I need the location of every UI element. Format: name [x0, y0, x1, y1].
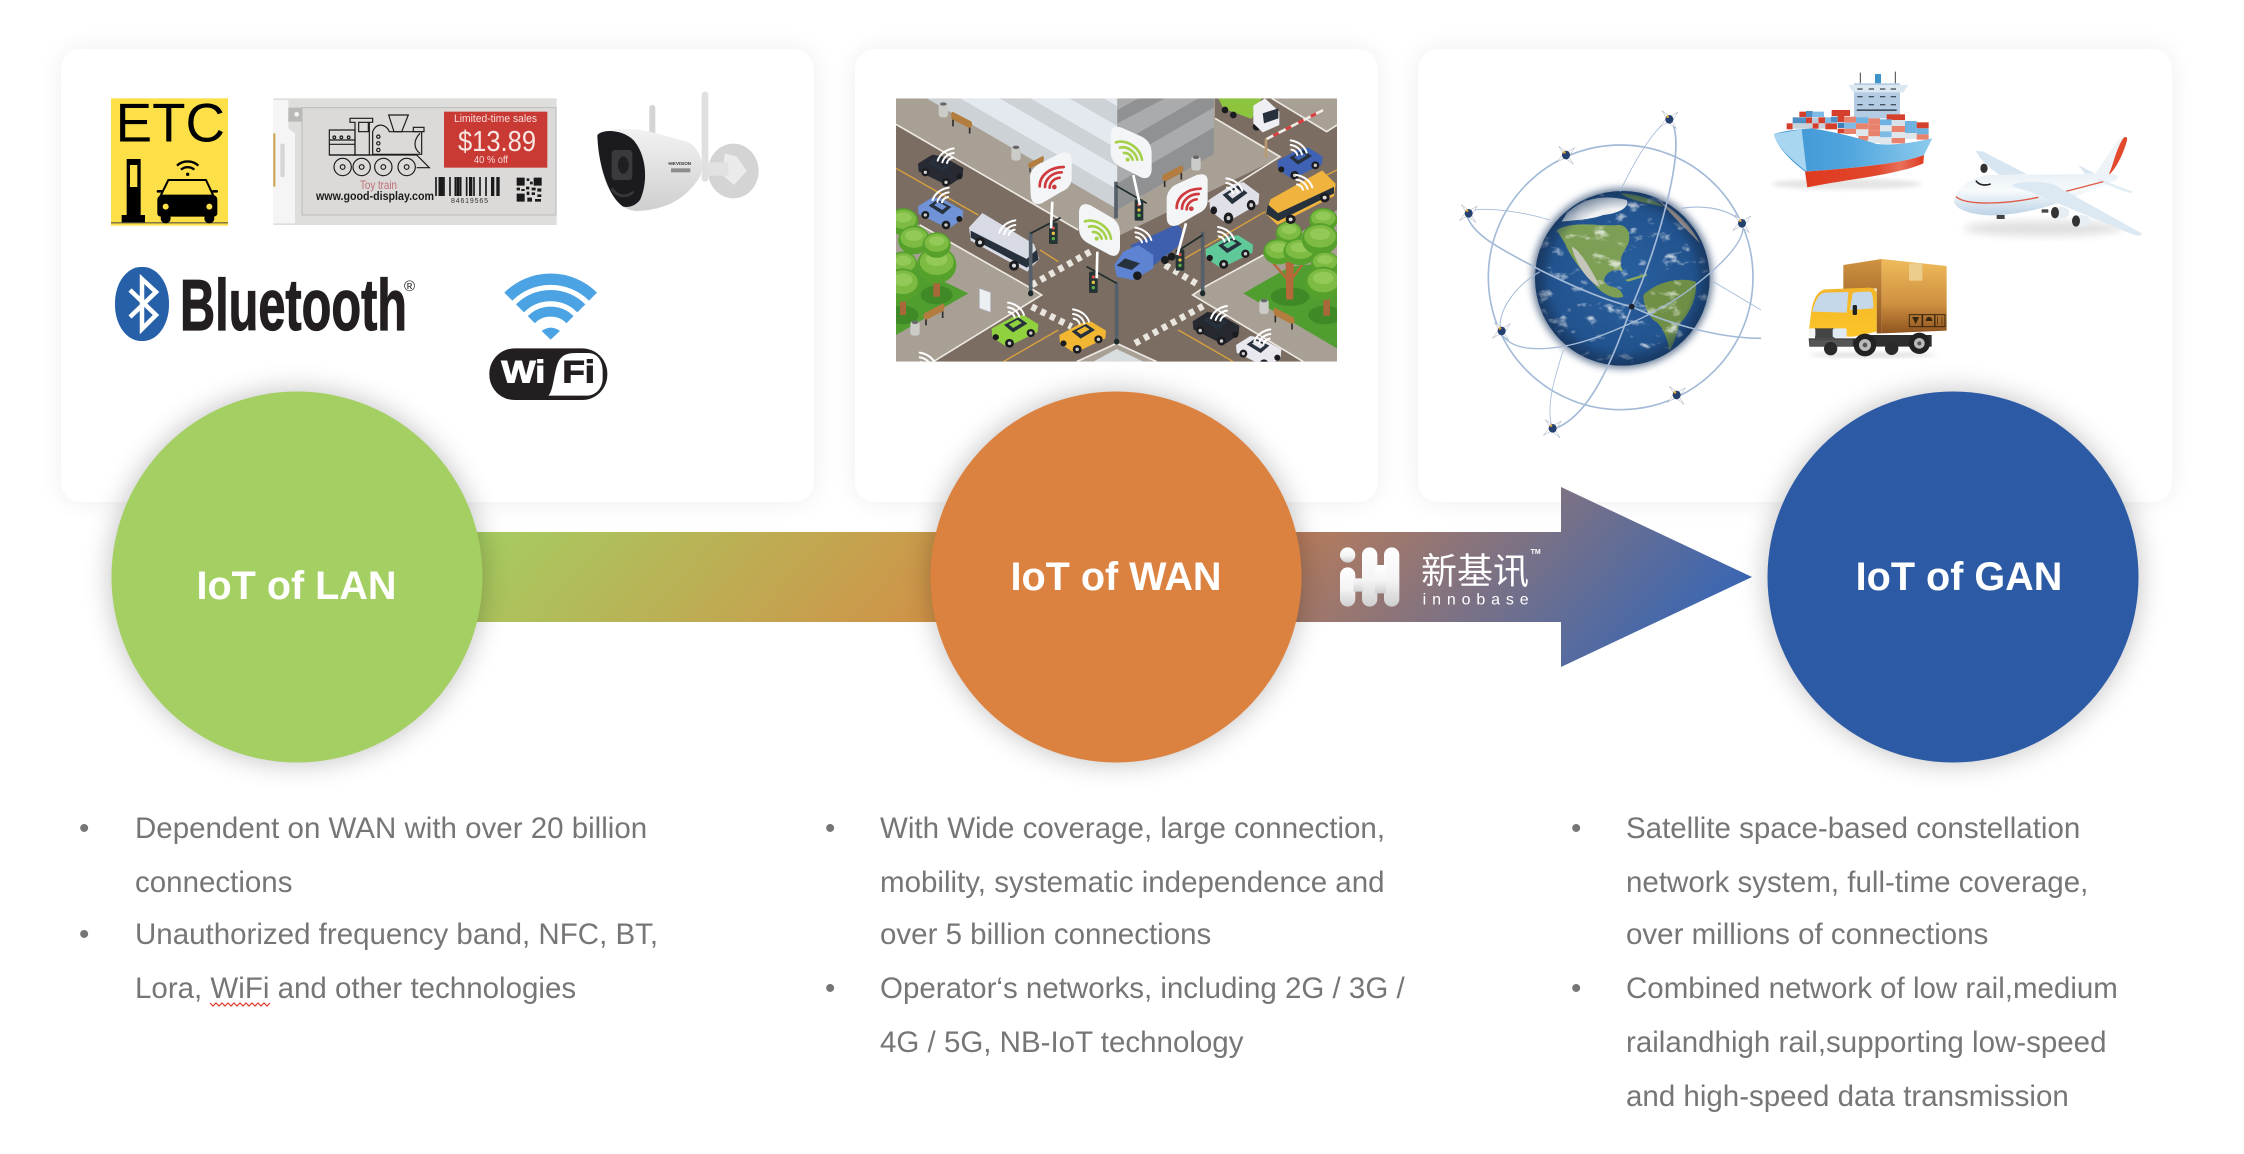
grass [896, 268, 968, 335]
logo: Bluetooth: Bluetooth [180, 266, 407, 346]
panel: LAN devices [61, 49, 814, 502]
logo: WiFi: Fi [562, 355, 595, 390]
icon: Bluetooth rune [115, 267, 169, 341]
circle: IoT of WAN: IoT of WAN [1010, 555, 1222, 599]
text block: GAN bullets: and high-speed data transmission [1626, 1080, 2069, 1113]
text block: GAN bullets: • [1571, 972, 1581, 1005]
circle: IoT of GAN: IoT of GAN [1856, 555, 2062, 599]
electronic shelf label: 40 % off [474, 155, 508, 166]
text block: WAN bullets [825, 812, 1405, 1059]
logo: innobase: TM [1531, 549, 1541, 556]
text block: WAN bullets: over 5 billion connections [880, 918, 1211, 951]
train drawing [329, 115, 429, 176]
text block: GAN bullets: over millions of connections [1626, 918, 1988, 951]
illustration: connected city intersection [885, 98, 1342, 368]
electronic shelf label: Toy train [360, 178, 397, 192]
text block: LAN bullets: Lora, WiFi and other technologies [135, 972, 576, 1005]
text block: LAN bullets: Dependent on WAN with over 20 billion [135, 812, 647, 845]
label text: Limited-time sales [454, 113, 537, 125]
text block: LAN bullets: connections [135, 866, 292, 899]
icon: airplane [1954, 137, 2142, 236]
vehicles [918, 155, 963, 187]
text block: LAN bullets [79, 812, 658, 1006]
illustration: earth and satellite constellation [1459, 111, 1761, 438]
circle: IoT of GAN [1768, 392, 2138, 762]
circle: IoT of WAN [930, 392, 1302, 762]
text block: GAN bullets: Satellite space-based constellation [1626, 812, 2080, 845]
text block: WAN bullets: Operator‘s networks, including 2G / 3G / [880, 972, 1405, 1005]
text block: WAN bullets: • [825, 972, 835, 1005]
logo mark [1340, 547, 1399, 607]
text block: LAN bullets: • [79, 918, 89, 951]
street furniture [951, 112, 972, 134]
text block: WAN bullets: mobility, systematic independence and [880, 866, 1385, 899]
electronic shelf label [273, 98, 557, 225]
logo: WiFi: Wi [501, 355, 545, 390]
text block: GAN bullets: network system, full-time coverage, [1626, 866, 2088, 899]
icon: ETC toll sign: ETC [116, 92, 225, 154]
logo: Bluetooth: ® [404, 278, 415, 295]
building [927, 98, 1117, 209]
icon: delivery truck [1809, 259, 1947, 357]
green truck [1218, 98, 1262, 119]
icon: ETC toll sign [111, 92, 228, 226]
circle: IoT of LAN: IoT of LAN [196, 564, 397, 608]
text block: WAN bullets: 4G / 5G, NB-IoT technology [880, 1026, 1244, 1059]
logo: innobase: innobase [1423, 591, 1529, 608]
south corner [1093, 349, 1143, 362]
barrier [1265, 138, 1267, 158]
trees [933, 283, 940, 297]
panel: GAN satellites and transport [1459, 72, 2142, 438]
icon: security camera [597, 92, 759, 211]
electronic shelf label: $13.89 [458, 126, 536, 158]
panel: WAN smart city [896, 98, 1337, 362]
text block: GAN bullets: Combined network of low rail,medium [1626, 972, 2118, 1005]
circle: IoT of LAN [112, 392, 482, 762]
text block: LAN bullets: • [79, 812, 89, 845]
arrow: gradient from LAN through WAN to GAN [420, 487, 1752, 667]
text block: GAN bullets: railandhigh rail,supporting low-speed [1626, 1026, 2106, 1059]
logo: WiFi [489, 279, 607, 400]
icon: security camera: HIKVISION [668, 161, 691, 167]
text block: GAN bullets: • [1571, 812, 1581, 845]
crosswalks [1032, 250, 1205, 343]
text block: GAN bullets [1571, 812, 2118, 1113]
blue truck [1130, 224, 1182, 266]
logo: innobase: 新基讯 [1421, 550, 1529, 591]
electronic shelf label: 84619565 [451, 198, 488, 205]
qr code [517, 178, 542, 202]
text block: WAN bullets: • [825, 812, 835, 845]
traffic poles and signs [1031, 182, 1203, 342]
electronic shelf label: www.good-display.com [315, 191, 434, 203]
icon: container ship [1772, 72, 1932, 189]
text block: LAN bullets: Unauthorized frequency band, NFC, BT, [135, 918, 658, 951]
roads [896, 98, 1337, 362]
text block: WAN bullets: With Wide coverage, large connection, [880, 812, 1385, 845]
logo: Bluetooth [115, 266, 415, 346]
logo: innobase [1340, 547, 1541, 608]
barcode [436, 177, 498, 196]
wifi marks on vehicles [938, 148, 954, 163]
